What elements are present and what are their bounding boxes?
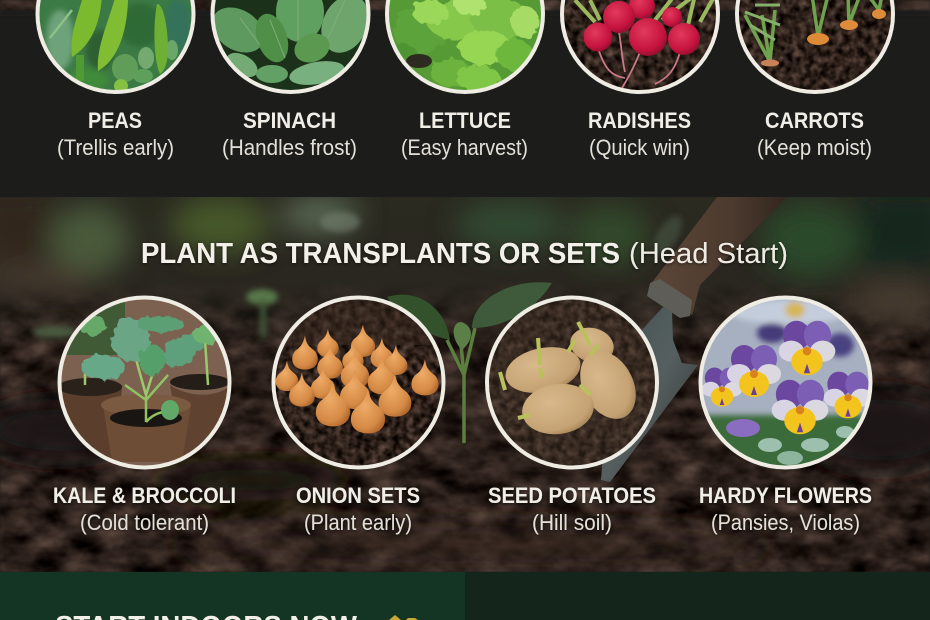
heading: plant as transplants or sets: (Head Start) (629, 238, 788, 270)
photo: radishes (564, 0, 716, 90)
ring: carrots (737, 0, 893, 92)
photo: lettuce (389, 0, 541, 90)
label: peas (57, 108, 174, 160)
photo: spinach (214, 0, 366, 90)
label: radishes (588, 108, 691, 160)
label: peas: PEAS (88, 108, 142, 133)
label: radishes: RADISHES (588, 108, 691, 133)
label: onion sets: (Plant early) (304, 510, 412, 535)
ring: hardy flowers (700, 298, 870, 468)
label: carrots: CARROTS (765, 108, 864, 133)
icon: gold seedling (389, 615, 418, 620)
photo: onion sets (276, 300, 442, 466)
ring: peas (38, 0, 194, 92)
label: lettuce (401, 108, 528, 160)
label: hardy flowers: HARDY FLOWERS (699, 483, 872, 508)
photo: kale and broccoli (62, 300, 228, 466)
label: carrots (757, 108, 872, 160)
ring: spinach (212, 0, 368, 92)
label: lettuce: LETTUCE (419, 108, 511, 133)
label: kale and broccoli: (Cold tolerant) (80, 510, 209, 535)
label: kale and broccoli: KALE & BROCCOLI (53, 483, 236, 508)
ring: lettuce (387, 0, 543, 92)
label: onion sets: ONION SETS (296, 483, 420, 508)
seedling (387, 282, 552, 443)
photo: hardy flowers (702, 300, 868, 466)
photo: carrots (739, 0, 891, 90)
label: radishes: (Quick win) (589, 135, 690, 160)
label: spinach: SPINACH (243, 108, 336, 133)
label: hardy flowers: (Pansies, Violas) (711, 510, 860, 535)
label: seed potatoes (488, 483, 656, 535)
ring: onion sets (274, 298, 444, 468)
ring: kale and broccoli (60, 298, 230, 468)
ring: seed potatoes (487, 298, 657, 468)
label: peas: (Trellis early) (57, 135, 174, 160)
panel: start indoors now (0, 572, 465, 620)
label: seed potatoes: SEED POTATOES (488, 483, 656, 508)
label: onion sets (296, 483, 420, 535)
panel: plant as transplants or sets (0, 190, 930, 572)
label: seed potatoes: (Hill soil) (532, 510, 612, 535)
label: kale and broccoli (53, 483, 236, 535)
heading: plant as transplants or sets: PLANT AS TRANSPLANTS OR SETS (141, 238, 620, 270)
label: lettuce: (Easy harvest) (401, 135, 528, 160)
ring: radishes (562, 0, 718, 92)
label: carrots: (Keep moist) (757, 135, 872, 160)
panel: lower right (465, 572, 930, 620)
label: hardy flowers (699, 483, 872, 535)
photo: peas (40, 0, 192, 90)
label: spinach: (Handles frost) (222, 135, 357, 160)
panel: plant as seeds (0, 0, 930, 160)
blurred garden background (0, 190, 930, 563)
photo: seed potatoes (489, 300, 655, 466)
label: spinach (222, 108, 357, 160)
trowel (601, 197, 787, 482)
